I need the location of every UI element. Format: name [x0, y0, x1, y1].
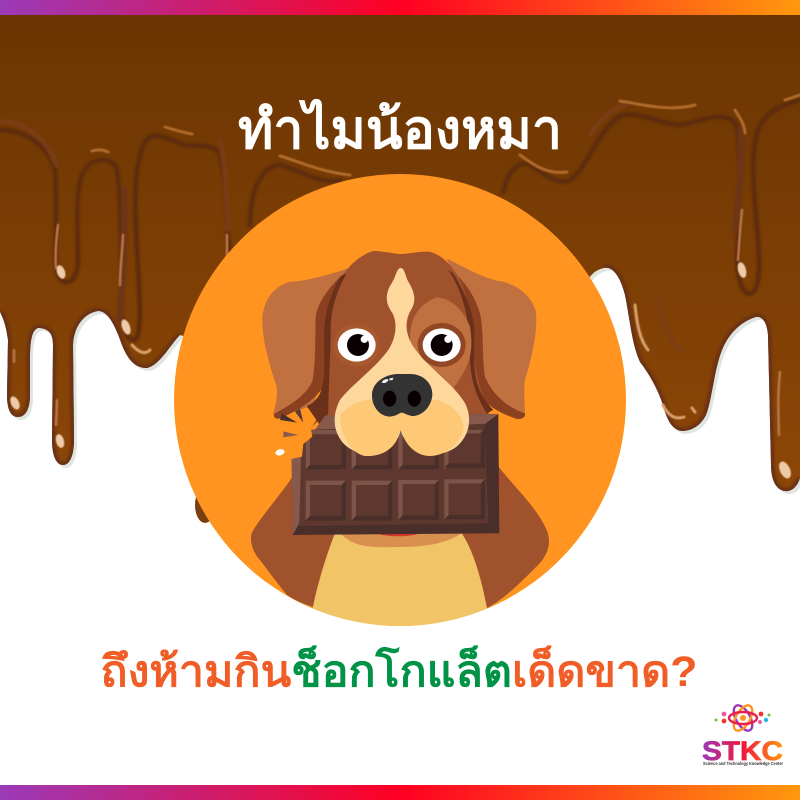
melted chocolate drips: [0, 15, 800, 523]
nose: [372, 374, 432, 417]
logo tagline: Science and Technology Knowledge Center: [703, 761, 783, 766]
chest: [312, 534, 487, 626]
head dark stripes: [307, 270, 493, 425]
drip body: [0, 15, 800, 491]
orange circle background: [174, 174, 626, 626]
icon: atom: [714, 702, 770, 734]
head: [312, 251, 490, 427]
left eye: [338, 328, 376, 362]
left ear: [262, 267, 353, 415]
top gradient bar: [0, 0, 800, 15]
chocolate bar: [292, 414, 499, 535]
bottom gradient bar: [0, 785, 800, 800]
collar: [377, 463, 500, 536]
right ear dark band: [458, 276, 526, 419]
drip glossy tips: [8, 261, 793, 480]
dog body: [251, 460, 549, 608]
drip highlights: [14, 95, 800, 435]
drip outer edge shading: [0, 268, 800, 491]
title line 1: ทำไมน้องหมา: [238, 98, 562, 160]
logo wordmark: STKC: [702, 736, 783, 766]
subtitle line 2: ถึงห้ามกินช็อกโกแล็ตเด็ดขาด?: [100, 645, 698, 696]
drip shadow: [3, 18, 800, 494]
illustration: dog with chocolate: [251, 251, 549, 640]
right ear: [447, 258, 536, 413]
bite mark on chocolate: [275, 407, 312, 459]
STKC logo: [702, 702, 783, 766]
muzzle and blaze: [335, 268, 468, 415]
right eye patch: [410, 297, 471, 388]
left ear dark band: [274, 274, 344, 419]
drip contour shading: [0, 100, 800, 350]
right eye: [418, 323, 466, 367]
muzzle overlapping chocolate: [334, 382, 470, 454]
neck shading: [340, 533, 462, 547]
small drip behind circle: [195, 487, 215, 523]
muzzle lower shade: [340, 399, 464, 456]
